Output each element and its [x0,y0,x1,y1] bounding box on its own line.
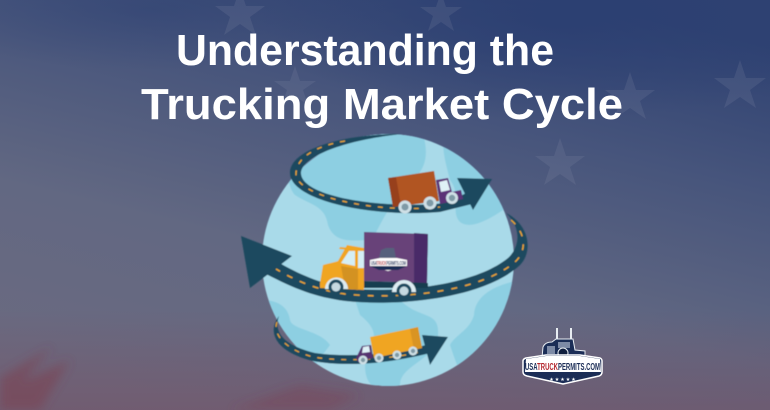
logo stars: ★★★★★ [549,377,577,383]
truck: yellow cab, purple box with logo [320,232,428,298]
road: top loop [290,134,472,213]
truck logo badge: USATRUCKPERMITS.COM [371,261,406,267]
globe graphic [241,130,530,390]
title: Understanding the [176,26,554,75]
arrow: bottom loop [422,335,448,365]
logo text: USATRUCKPERMITS.COM [525,362,600,373]
logo badge [523,355,602,384]
arrow: top loop [457,178,492,210]
truck: orange box, purple cab [388,171,463,214]
logo truck [542,328,585,358]
road: bottom loop [274,316,430,364]
logo: USA Truck Permits [523,328,602,384]
globe [262,133,514,387]
background stars [215,0,766,185]
title: Trucking Market Cycle [141,80,623,129]
arrow: middle loop [241,236,292,288]
road: middle loop [266,213,528,303]
truck: yellow box, purple cab [356,327,422,364]
title [141,26,623,129]
